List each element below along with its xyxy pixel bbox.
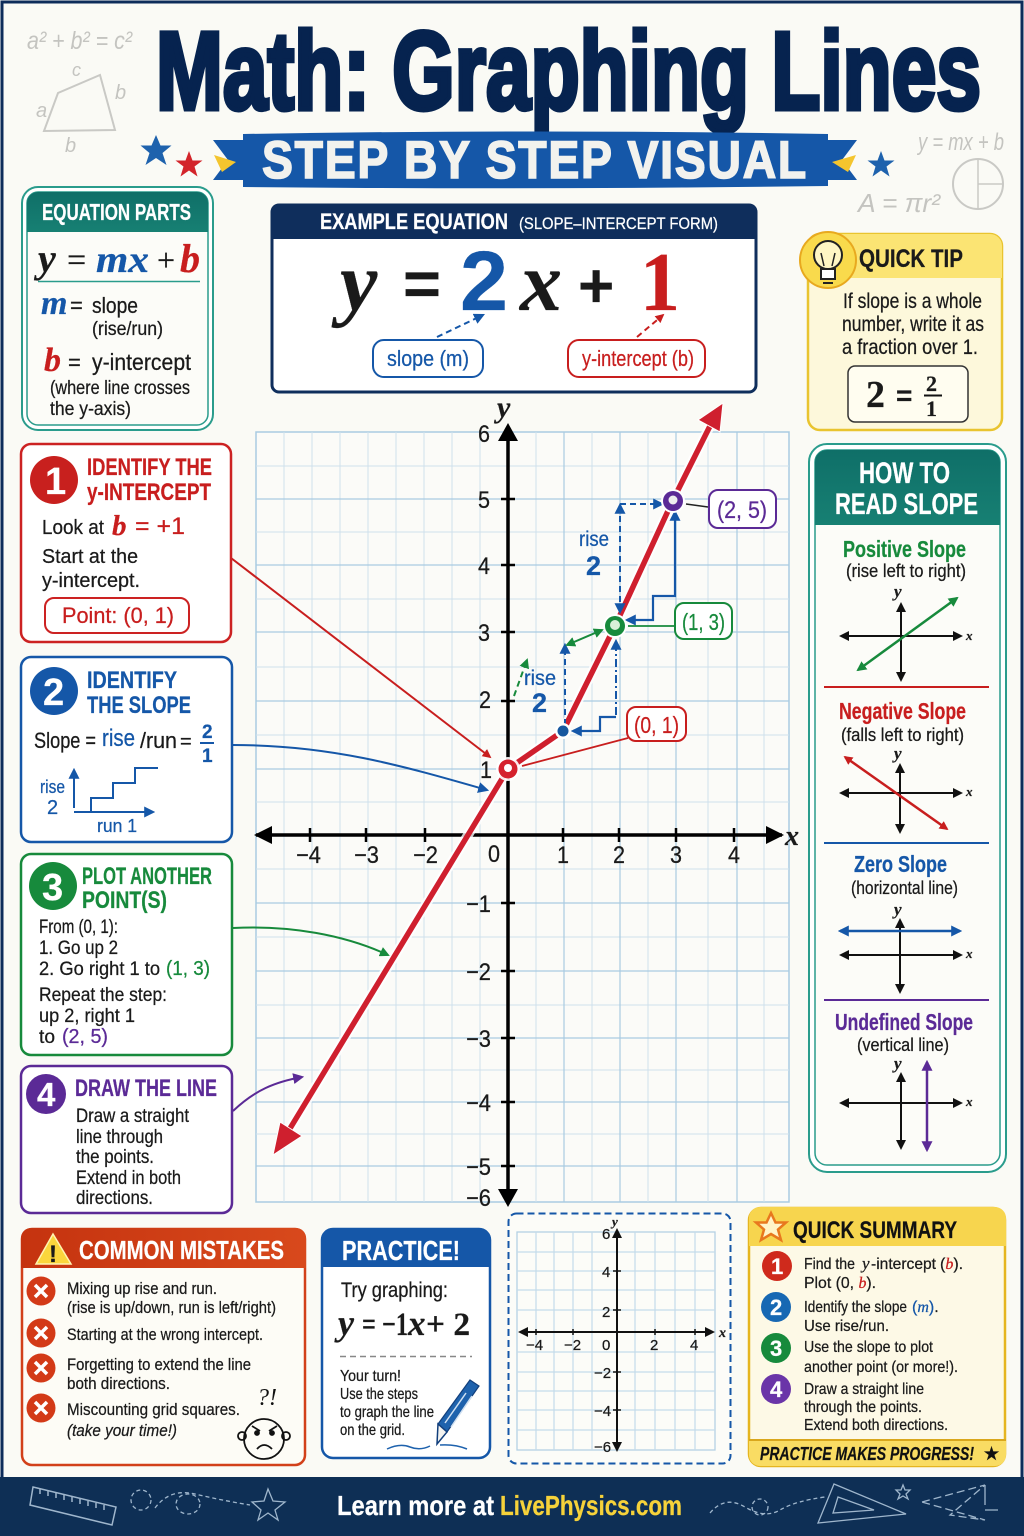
text: mistakes list: Mixing up rise and run.	[67, 1279, 217, 1298]
text: slope formula: =	[180, 731, 192, 753]
label: point: Point: (0, 1)	[62, 603, 174, 628]
axis labels	[526, 1214, 726, 1456]
text: body	[42, 510, 185, 592]
formula: y = 2x + 1: 2	[460, 234, 508, 328]
label: rise 2 lower: rise	[524, 667, 556, 690]
sketch: pythagorean doodles	[27, 27, 133, 157]
text: tip body: If slope is a whole	[843, 290, 982, 313]
text: summary list: Identify the slope	[804, 1299, 907, 1316]
text: m = slope: slope	[92, 293, 138, 318]
arrow: step 3 to line	[233, 927, 388, 955]
y axis numbers: −5	[466, 1154, 491, 1181]
section: positive slope: y	[892, 582, 902, 601]
text: b = y-intercept	[44, 342, 192, 420]
text: summary list: Extend both directions.	[804, 1417, 948, 1434]
text: summary list: through the points.	[804, 1399, 922, 1416]
icon: blue star right	[868, 151, 894, 176]
panel: practice grid	[508, 1214, 730, 1464]
label: slope (m): slope (m)	[387, 346, 469, 371]
formula box: 2 = 2/1: 2	[866, 374, 885, 416]
text: m = slope: (rise/run)	[92, 319, 163, 340]
text: body: Look at	[42, 517, 104, 539]
diagram: staircase rise and run: run 1	[97, 816, 137, 836]
panel: quick summary	[749, 1207, 1006, 1466]
section: negative slope: Negative Slope	[839, 698, 966, 724]
badges: 2	[770, 1295, 782, 1320]
text: body: line through	[76, 1127, 163, 1148]
icon: light bulb	[800, 232, 856, 288]
axis labels: y	[610, 1214, 618, 1229]
text: body: Start at the	[42, 546, 138, 568]
y axis numbers: 2	[479, 687, 491, 714]
banner: step by step visual: STEP BY STEP VISUAL	[262, 131, 808, 190]
text: summary list: Use rise/run.	[804, 1318, 889, 1335]
x axis numbers: 1	[557, 842, 569, 869]
text: body: Extend in both	[76, 1168, 181, 1189]
formula: y = -1x + 2: + 2	[426, 1307, 470, 1343]
axis labels: 2	[602, 1304, 610, 1321]
formula: y = -1x + 2: y	[334, 1303, 355, 1343]
y axis numbers: −6	[466, 1185, 491, 1212]
text: slope formula: 2	[202, 722, 213, 743]
text: your turn: Use the steps	[340, 1386, 418, 1403]
text: tip body: number, write it as	[842, 313, 984, 336]
formula: y = 2x + 1: 1	[640, 236, 680, 329]
badge 3: 3	[42, 867, 63, 909]
text: summary list: (b).	[940, 1256, 963, 1273]
arrow: step 2 to intercept	[233, 745, 487, 790]
sketch: pythagorean doodles: b	[65, 135, 76, 157]
y axis numbers: 3	[478, 620, 490, 647]
text: summary list: (m).	[912, 1299, 939, 1316]
label: rise 2 lower: 2	[532, 688, 547, 718]
heading: example equation	[320, 209, 718, 234]
text: mistakes list: Starting at the wrong intercept.	[67, 1325, 263, 1344]
y axis numbers: 6	[478, 421, 490, 448]
arrow: to intercept	[637, 315, 663, 337]
text: summary list: Use the slope to plot	[804, 1339, 933, 1356]
text: learn more: LivePhysics.com	[500, 1490, 682, 1521]
panel: step 3	[21, 854, 232, 1055]
x axis numbers: 0	[488, 841, 500, 868]
formula: y = -1x + 2	[334, 1303, 470, 1343]
text: summary list: y	[860, 1254, 870, 1273]
text: body: (2, 5)	[62, 1026, 108, 1048]
section: positive slope	[841, 536, 973, 680]
formula: y = -1x + 2: x	[407, 1304, 426, 1343]
text: body: up 2, right 1	[39, 1006, 135, 1027]
section: undefined slope: Undefined Slope	[835, 1009, 973, 1035]
badges: 4	[770, 1377, 783, 1402]
x axis numbers: 2	[613, 842, 625, 869]
section: undefined slope	[835, 1009, 973, 1150]
text: body	[76, 1106, 190, 1209]
y axis numbers: −2	[466, 959, 491, 986]
y axis numbers	[466, 421, 492, 1212]
y axis numbers: 4	[478, 553, 490, 580]
section: zero slope: x	[965, 946, 973, 961]
grid	[256, 432, 789, 1202]
axis labels: −4	[526, 1337, 543, 1354]
x axis left arrowhead	[254, 826, 272, 844]
heading: IDENTIFY	[87, 667, 177, 694]
text: slope formula: rise	[102, 725, 135, 752]
y axis top arrowhead	[498, 423, 518, 441]
text: your turn	[340, 1368, 434, 1439]
panel: step 4	[21, 1066, 232, 1213]
badges	[761, 1251, 792, 1404]
text: mistakes list	[67, 1279, 276, 1440]
text: learn more	[337, 1490, 682, 1521]
label: rise 2 upper: 2	[586, 551, 601, 581]
panel: equation parts	[22, 187, 213, 430]
sketch: pythagorean doodles: c	[72, 60, 81, 80]
section: negative slope	[839, 698, 973, 832]
text: summary list	[804, 1254, 963, 1434]
text: body: to	[39, 1027, 55, 1048]
axis name y: y	[494, 391, 511, 424]
callout: (0, 1)	[522, 707, 686, 766]
x axis numbers: −2	[413, 842, 438, 869]
text: tip body: a fraction over 1.	[842, 336, 978, 359]
text: m = slope	[41, 285, 163, 340]
text: summary list: Find the	[804, 1256, 855, 1273]
y axis numbers: −4	[466, 1090, 491, 1117]
text: body: 1. Go up 2	[39, 938, 118, 959]
y axis	[506, 430, 510, 1200]
text: body: Draw a straight	[76, 1106, 190, 1127]
axis labels: −2	[564, 1337, 581, 1354]
badge 4	[26, 1074, 66, 1114]
heading: DRAW THE LINE	[75, 1075, 217, 1102]
panel: quick tip	[800, 232, 1002, 430]
formula: y = mx + b: b	[180, 236, 200, 281]
panel: example equation	[271, 204, 757, 392]
formula: y = mx + b	[34, 236, 200, 281]
callout: (1, 3)	[628, 603, 732, 639]
doodle: ruler	[30, 1487, 116, 1525]
chart: main coordinate graph	[254, 391, 799, 1212]
axis labels: −4	[594, 1403, 611, 1420]
point: blue step	[555, 723, 571, 739]
text: body: y-intercept.	[42, 570, 140, 592]
text: body: directions.	[76, 1188, 153, 1209]
section: undefined slope: (vertical line)	[857, 1035, 949, 1055]
icon: warning triangle: !	[49, 1241, 57, 1268]
heading: QUICK SUMMARY	[793, 1217, 957, 1244]
y axis numbers: 5	[478, 487, 490, 514]
heading: COMMON MISTAKES	[79, 1235, 284, 1265]
text: b = y-intercept: the y-axis)	[50, 399, 131, 420]
x axis	[256, 833, 782, 837]
sketch: pythagorean doodles: a² + b² = c²	[27, 27, 133, 55]
text: learn more: Learn more at	[337, 1490, 494, 1521]
callout: (0, 1): (0, 1)	[634, 712, 679, 738]
axis labels: x	[718, 1326, 726, 1341]
y axis bottom arrowhead	[498, 1189, 518, 1207]
label: y-intercept (b)	[568, 340, 705, 377]
text: summary list: Plot (0, b).	[804, 1275, 876, 1292]
section: positive slope: Positive Slope	[843, 536, 966, 562]
axis labels: 6	[602, 1226, 610, 1243]
arrow: step 1 to intercept	[231, 558, 490, 757]
doodle: dashed path and star left	[131, 1489, 285, 1520]
label: slope (m)	[373, 340, 483, 377]
red graphed line	[273, 403, 723, 1155]
text: mistakes list: Forgetting to extend the line	[67, 1355, 251, 1374]
formula: y = 2x + 1: +	[578, 252, 614, 321]
panel: practice	[321, 1229, 491, 1458]
rise and run guides lower	[514, 630, 616, 731]
text: slope formula: Slope =	[34, 728, 96, 753]
text: m = slope: =	[70, 293, 83, 318]
formula box: 2 = 2/1: 1	[926, 396, 937, 421]
heading: PRACTICE!	[342, 1235, 460, 1266]
text: your turn: Your turn!	[340, 1368, 401, 1385]
text: summary list: another point (or more!).	[804, 1359, 958, 1376]
text: slope formula: 1	[202, 746, 213, 767]
point: (2,5)	[661, 489, 685, 513]
icon: confused face: ?!	[257, 1385, 277, 1411]
arrow: to slope	[437, 315, 483, 337]
badge 2	[30, 667, 78, 715]
section: undefined slope: y	[892, 1054, 902, 1073]
text: your turn: to graph the line	[340, 1404, 434, 1421]
label: rise 2 lower	[524, 667, 556, 718]
section: negative slope: y	[892, 744, 902, 763]
text: b = y-intercept: =	[68, 350, 81, 375]
heading: IDENTIFY THE	[87, 454, 212, 481]
text: body: Repeat the step:	[39, 985, 167, 1006]
text: slope formula	[34, 722, 214, 767]
text: m = slope: m	[41, 285, 67, 322]
axis labels: 0	[602, 1337, 610, 1354]
section: positive slope: (rise left to right)	[846, 561, 966, 581]
text: mistakes list: Miscounting grid squares.	[67, 1400, 240, 1419]
text: tip body	[842, 290, 984, 359]
axis labels: 4	[602, 1264, 610, 1281]
icon: pencil	[387, 1380, 479, 1449]
text: mistakes list: (rise is up/down, run is left/right)	[67, 1298, 276, 1317]
formula: y = 2x + 1	[331, 234, 680, 329]
heading: quick tip: QUICK TIP	[859, 245, 963, 273]
section: zero slope: Zero Slope	[854, 851, 947, 877]
text: try graphing: Try graphing:	[341, 1279, 448, 1302]
axis labels: −2	[594, 1365, 611, 1382]
text: mistakes list: (take your time!)	[67, 1421, 177, 1440]
text: mistakes list: both directions.	[67, 1374, 170, 1393]
text: body: (1, 3)	[166, 958, 210, 980]
diagram: staircase rise and run	[40, 768, 158, 836]
formula: y = mx + b: mx	[96, 239, 149, 281]
text: body: the points.	[76, 1147, 154, 1168]
axis labels: 2	[650, 1337, 658, 1354]
heading: example equation: EXAMPLE EQUATION	[320, 209, 508, 234]
formula box: 2 = 2/1	[848, 366, 968, 422]
x axis numbers: −3	[354, 842, 379, 869]
heading	[87, 454, 212, 506]
heading: y-INTERCEPT	[87, 479, 211, 506]
diagram: staircase rise and run: 2	[47, 797, 58, 819]
doodle: dashed path and triangle right	[710, 1484, 998, 1523]
section: zero slope: y	[892, 900, 902, 919]
axis ticks	[310, 499, 734, 1166]
callout: (2, 5): (2, 5)	[717, 497, 767, 524]
heading: how to read slope	[835, 457, 978, 521]
formula: y = mx + b: =	[67, 242, 86, 279]
axis labels: 4	[690, 1337, 698, 1354]
section: positive slope: x	[965, 628, 973, 643]
formula box: 2 = 2/1: =	[896, 380, 912, 411]
icon: star	[756, 1213, 786, 1240]
label: rise 2 upper	[579, 528, 609, 581]
formula: y = 2x + 1: =	[403, 250, 441, 319]
label: point	[45, 598, 189, 633]
section: negative slope: x	[965, 784, 973, 799]
panel: step 2	[21, 657, 232, 842]
text: slope formula: /run	[140, 728, 177, 753]
heading: equation parts: EQUATION PARTS	[42, 199, 191, 225]
text: b = y-intercept: y-intercept	[92, 349, 192, 375]
text: body	[39, 917, 210, 1048]
text: body: = +1	[135, 513, 185, 540]
x axis right arrowhead	[766, 826, 784, 844]
formula box: 2 = 2/1: 2	[926, 371, 937, 396]
label: y-intercept (b): y-intercept (b)	[582, 346, 694, 371]
axes	[520, 1230, 713, 1450]
sketch: pythagorean doodles: a	[36, 100, 47, 122]
formula: y = 2x + 1: x	[518, 236, 562, 329]
text: your turn: on the grid.	[340, 1422, 405, 1439]
icon: x marks	[26, 1276, 56, 1422]
heading: POINT(S)	[82, 887, 167, 914]
section: zero slope: (horizontal line)	[851, 878, 958, 898]
sketch: formula doodles right: A = πr²	[856, 188, 941, 218]
panel: common mistakes	[21, 1228, 306, 1465]
axis name x: x	[784, 821, 799, 852]
text: summary list: Draw a straight line	[804, 1381, 924, 1398]
rise and run guides upper	[620, 504, 675, 620]
arrow: step 4 to line	[233, 1077, 302, 1111]
heading	[87, 667, 191, 719]
section: negative slope: (falls left to right)	[841, 725, 964, 745]
badges: 3	[770, 1336, 782, 1361]
badge 4: 4	[37, 1076, 56, 1113]
footer	[0, 1477, 1024, 1536]
x axis numbers	[296, 841, 740, 869]
grid	[517, 1232, 715, 1450]
point: (0,1)	[496, 757, 520, 781]
x axis numbers: 4	[728, 842, 740, 869]
formula: y = -1x + 2: = −1	[362, 1307, 408, 1343]
formula: y = 2x + 1: y	[331, 236, 378, 329]
badge 3	[29, 862, 77, 910]
panel: how to read slope	[809, 444, 1006, 1172]
text: body: b	[112, 510, 126, 542]
icon: blue star left	[140, 135, 172, 165]
badge 2: 2	[43, 672, 64, 714]
text: body: From (0, 1):	[39, 917, 118, 938]
badges: 1	[771, 1254, 783, 1279]
section: zero slope	[840, 851, 973, 992]
icon: warning triangle	[36, 1234, 71, 1268]
text: summary list: -intercept	[871, 1256, 937, 1273]
heading: THE SLOPE	[87, 692, 191, 719]
diagram: staircase rise and run: rise	[40, 777, 65, 797]
callout: (1, 3): (1, 3)	[682, 609, 725, 635]
y axis numbers: −3	[466, 1026, 491, 1053]
point: (1,3)	[603, 614, 627, 638]
panel: step 1	[21, 444, 231, 642]
text: b = y-intercept: (where line crosses	[50, 378, 190, 399]
axis labels: −6	[594, 1439, 611, 1456]
badge 1: 1	[45, 461, 66, 503]
badge 1	[30, 456, 78, 504]
y axis numbers: 1	[480, 757, 492, 784]
heading: example equation: (SLOPE–INTERCEPT FORM)	[519, 214, 718, 233]
heading	[82, 863, 212, 914]
callout: (2, 5)	[686, 490, 776, 528]
section: undefined slope: x	[965, 1094, 973, 1109]
x axis numbers: 3	[670, 842, 682, 869]
y axis numbers: −1	[466, 891, 491, 918]
label: rise 2 upper: rise	[579, 528, 609, 551]
callout: practice makes progress: ★	[983, 1443, 1000, 1465]
text: b = y-intercept: b	[44, 342, 61, 379]
sketch: formula doodles right	[856, 129, 1004, 218]
heading: PLOT ANOTHER	[82, 863, 212, 890]
sketch: pythagorean doodles: b	[115, 82, 126, 104]
icon: confused face	[238, 1385, 290, 1459]
formula: y = mx + b: +	[157, 242, 175, 278]
heading: how to read slope: HOW TO	[859, 457, 950, 490]
text: body: 2. Go right 1 to	[39, 959, 160, 980]
formula: y = mx + b: y	[34, 236, 56, 281]
icon: red star	[176, 151, 202, 176]
x axis numbers: −4	[296, 842, 321, 869]
